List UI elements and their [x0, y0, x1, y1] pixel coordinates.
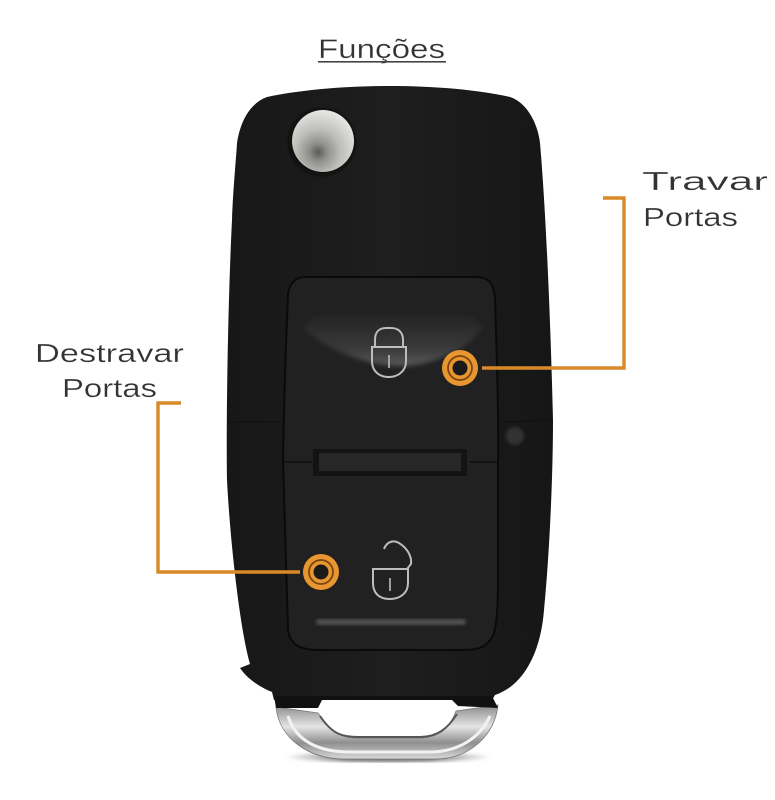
callout: Travar Portas [442, 166, 769, 386]
flip seam [227, 420, 552, 422]
top button highlight [303, 312, 482, 366]
icon: unlocked padlock [373, 541, 411, 599]
label [642, 166, 769, 232]
key shadow [283, 752, 493, 762]
bottom button highlight [316, 619, 466, 625]
key fob body [227, 86, 553, 708]
callout: Destravar Portas [35, 338, 339, 590]
marker: lock button [442, 350, 478, 386]
button panel [283, 277, 498, 650]
slot between buttons [313, 449, 467, 476]
label: Destravar [35, 338, 184, 368]
label [35, 338, 184, 403]
metal release button [289, 109, 355, 175]
icon: locked padlock [372, 328, 406, 377]
label: Portas [643, 202, 738, 232]
button divider [283, 461, 498, 463]
marker: unlock button [303, 554, 339, 590]
title: Funções [318, 34, 445, 64]
label: Travar [642, 166, 769, 196]
label: Portas [62, 373, 157, 403]
indicator LED [506, 427, 524, 445]
key ring loop [276, 705, 498, 759]
blade clip at base [274, 696, 498, 708]
